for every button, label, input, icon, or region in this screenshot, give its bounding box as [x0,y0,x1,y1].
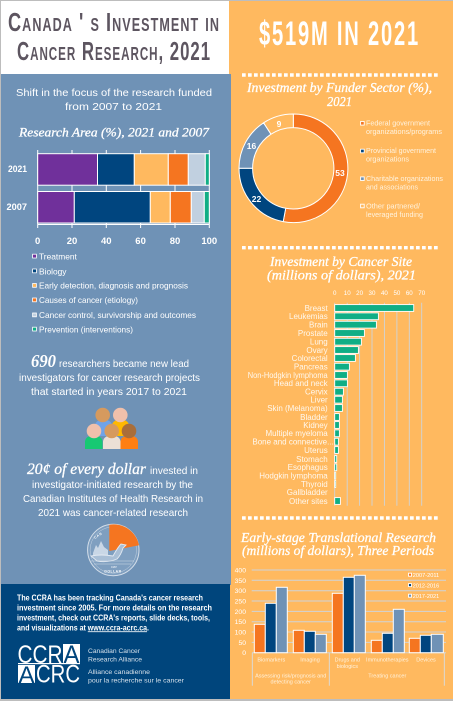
bar chart: cancer site: Liver [310,396,328,404]
bar chart: early-stage research: Immunotherapies [366,658,409,664]
donut chart: funder sector: 9 [277,119,282,129]
heading: early-stage translational research [240,531,436,559]
bar chart: cancer site: 70 [418,290,426,297]
bar chart: early-stage research: 100 [235,630,246,636]
donut chart: funder sector: 53 [335,168,345,178]
icon: dollar coin with 20 percent wedge: DOLLAR [104,570,122,574]
bar chart: cancer site: 0 [333,290,337,297]
bar chart: cancer site: Lung [310,338,328,346]
text block: 20 cents of every dollar: 20¢ of every dollar [27,461,147,478]
heading: cancer site: Investment by Cancer Site [269,255,412,270]
legend: three periods [408,573,439,600]
bar chart: early-stage research: Devices [416,658,436,664]
bar chart: cancer site: Head and neck [274,379,329,388]
donut chart: funder sector: 16 [247,141,256,151]
bar chart: early-stage research: detecting cancer [271,680,311,686]
donut chart: funder sector: 22 [252,194,261,204]
icon: group of people [85,408,138,449]
bar chart: early-stage research: Assessing risk/prognosis and [255,673,326,679]
text block: 20 cents of every dollar: Canadian Institutes of Health Research in [23,493,203,505]
bar chart: cancer site: 20 [356,290,364,297]
bar chart: cancer site: Gallbladder [287,488,328,497]
bar chart: early-stage research: 400 [235,568,246,574]
bar chart: cancer site: 40 [381,290,388,297]
bar chart: cancer site: Stomach [296,455,328,464]
bar chart: cancer site: Other sites [289,497,328,506]
logo: CCRA ACRC: CCR [18,641,62,669]
icon: dollar coin with 20 percent wedge: CAN [93,531,103,540]
stacked bar chart: research area: 40 [101,236,112,247]
legend: funder sector: organizations/programs [366,127,442,136]
panel: CCRA footer: investment, check out CCRA's reports, slide decks, tools, [17,612,210,622]
title panel: Cancer Research, 2021 [17,36,211,66]
donut chart: funder sector [239,114,348,223]
bar chart: early-stage research: 250 [235,598,246,606]
text block: 20 cents of every dollar [23,461,203,519]
legend: funder sector: Charitable organizations [366,174,443,183]
logo: CCRA ACRC: A [18,662,34,689]
bar chart: cancer site: 10 [344,290,351,297]
stacked bar chart: research area: 2021 [8,164,28,175]
logo: CCRA ACRC: CRC [36,660,80,688]
bar chart: cancer site: Cervix [305,388,328,396]
subtitle: shift in focus: from 2007 to 2021 [65,101,162,113]
heading: cancer site: (millions of dollars), 2021 [267,268,416,284]
heading: funder sector [246,81,432,110]
bar chart: early-stage research [235,568,446,686]
icon: dollar coin with 20 percent wedge [88,524,139,576]
bar chart: early-stage research: Drugs and [335,658,360,664]
legend: research area: Prevention (interventions) [39,324,133,334]
bar chart: cancer site: Brain [309,320,328,330]
bar chart: cancer site: Skin (Melanoma) [267,404,328,413]
heading: research area: Research Area (%), 2021 and 2007 [18,124,210,140]
panel: CCRA footer: investment since 2005. For more details on the research [17,602,212,612]
logo text: organization name: Research Alliance [88,656,143,663]
text block: 20 cents of every dollar: investigator-initiated research by the [32,479,193,491]
text block: 690 researchers: that started in years 2017 to 2021 [31,386,187,398]
legend: three periods: 2017-2021 [413,594,439,600]
bar chart: early-stage research: 50 [238,640,246,647]
stacked bar chart: research area: 60 [135,236,146,247]
legend: three periods: 2007-2011 [413,573,439,579]
bar chart: early-stage research: 200 [235,609,246,616]
bar chart: cancer site: Ovary [306,346,328,355]
bar chart: cancer site: 30 [369,290,376,297]
bar chart: early-stage research: Imaging [300,658,320,664]
bar chart: cancer site [248,290,426,506]
text block: 690 researchers: investigators for cancer research projects [19,372,200,384]
panel: CCRA footer: The CCRA has been tracking Canada's cancer research [17,592,203,602]
title panel [1,1,229,74]
logo text: organization name: Canadian Cancer [88,648,140,655]
logo text: organization name: pour la recherche sur le cancer [88,677,184,684]
text block: 20 cents of every dollar: invested in [150,465,198,477]
panel: left blue column [1,74,231,585]
bar chart: cancer site: Prostate [298,329,328,338]
stacked bar chart: research area: 80 [170,236,180,247]
legend: research area: Cancer control, survivorship and outcomes [39,310,196,320]
text block: 20 cents of every dollar: 2021 was cancer-related research [38,507,188,519]
stacked bar chart: research area: 0 [35,236,40,247]
stacked bar chart: research area: 20 [67,236,77,247]
bar chart: early-stage research: 150 [235,619,246,626]
legend: three periods: 2012-2016 [413,583,439,589]
stacked bar chart: research area: 2007 [6,202,27,213]
bar chart: early-stage research: 0 [242,650,246,657]
bar chart: early-stage research: Biomarkers [257,658,285,664]
legend: funder sector: Federal government [366,118,430,128]
panel: CCRA footer [1,584,230,699]
bar chart: cancer site: Leukemias [289,312,328,321]
heading: funder sector: 2021 [327,95,352,110]
bar chart: cancer site: Uterus [304,446,328,455]
text block: 690 researchers: 690 [31,351,56,371]
bar chart: cancer site: Thyroid [301,480,328,489]
heading: cancer site [267,255,416,284]
heading: funder sector: Investment by Funder Sector (%), [246,81,432,96]
legend: research area: Causes of cancer (etiology) [39,295,138,305]
logo: CCRA ACRC [18,641,80,689]
bar chart: cancer site: Pancreas [294,362,328,372]
bar chart: cancer site: Multiple myeloma [265,429,328,438]
bar chart: cancer site: 50 [393,290,401,297]
stacked bar chart: research area: 100 [201,236,217,247]
title panel: Canada ' s Investment in [8,7,220,37]
bar chart: cancer site: Kidney [303,421,328,430]
bar chart: cancer site: Colorectal [292,354,328,363]
text block: 690 researchers: researchers became new lead [59,358,189,370]
text block: 690 researchers [19,351,200,398]
bar chart: cancer site: Hodgkin lymphoma [259,472,328,480]
legend: research area: Treatment [39,252,78,262]
bar chart: early-stage research: 300 [235,588,246,595]
logo text: organization name [88,648,184,684]
logo text: organization name: Alliance canadienne [88,669,151,676]
legend: funder sector: and associations [366,182,418,192]
legend: funder sector: Other partnered/ [366,202,421,210]
bar chart: cancer site: Esophagus [288,463,328,472]
bar chart: cancer site: Non-Hodgkin lymphoma [248,371,328,380]
heading: early-stage translational research: Early-stage Translational Research [240,531,436,546]
bar chart: early-stage research: biologics [337,664,358,670]
heading: early-stage translational research: (millions of dollars), Three Periods [242,544,435,559]
legend: research area [33,252,196,334]
bar chart: cancer site: Breast [305,304,328,313]
legend: funder sector: organizations [366,154,409,164]
bar chart: early-stage research: 350 [235,578,246,585]
legend: funder sector [361,118,443,219]
bar chart: early-stage research: Treating cancer [368,673,406,679]
icon: dollar coin with 20 percent wedge: 1987 [111,565,117,569]
legend: research area: Biology [39,266,67,276]
bar chart: cancer site: Bladder [300,413,328,422]
stacked bar chart: research area [6,150,217,247]
subtitle: shift in focus: Shift in the focus of the research funded [16,87,212,99]
subtitle: shift in focus [16,87,212,113]
logo: CCRA ACRC: A [64,641,80,669]
legend: research area: Early detection, diagnosis and prognosis [39,280,188,290]
legend: funder sector: leveraged funding [366,210,423,219]
bar chart: cancer site: 60 [406,290,413,297]
legend: funder sector: Provincial government [366,146,436,155]
bar chart: cancer site: Bone and connective.... [252,438,336,446]
panel: CCRA footer: and visualizations at www.ccra-acrc.ca. [17,622,149,632]
